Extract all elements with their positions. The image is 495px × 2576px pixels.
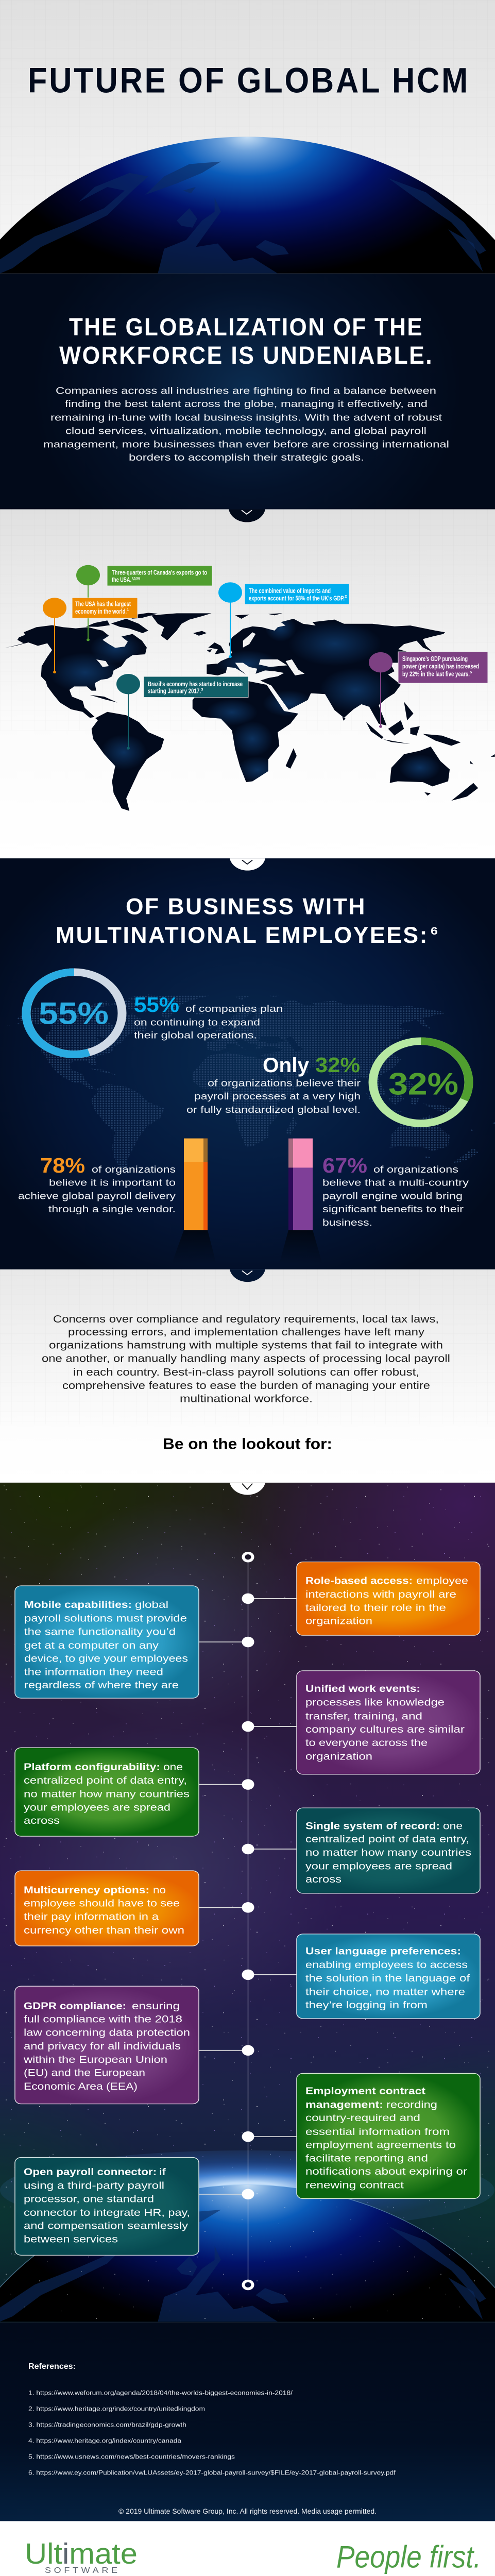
text block: intro paragraph: cloud services, virtualization, mobile technology, and global payroll (65, 426, 426, 436)
feature: mobile capabilities: global (135, 1599, 168, 1611)
logo: Ultimate Software: SOFTWARE (45, 2566, 117, 2575)
panel: compliance text (0, 1269, 495, 1483)
logo: Ultimate Software: Ultimate (25, 2537, 138, 2570)
callout: Brazil: starting January 2017. (148, 687, 201, 695)
text block: intro paragraph: finding the best talent across the globe, managing it effectively, and (65, 399, 428, 410)
callout: UK: exports account for 58% of the UK’s GDP. (249, 594, 345, 602)
feature: GDPR compliance: ensuring (132, 2000, 180, 2011)
callout: Canada: Three-quarters of Canada’s exports go to (112, 569, 207, 576)
stat: 55% of companies: of companies plan (185, 1004, 283, 1014)
stat: only 32%: or fully standardized global level. (186, 1104, 361, 1115)
feature: user language preferences: enabling employees to access (305, 1959, 468, 1971)
feature: platform configurability: centralized point of data entry, (24, 1774, 187, 1786)
stat: 67% of organizations: 67% (322, 1154, 367, 1177)
donut chart: 55% (26, 972, 122, 1055)
feature: GDPR compliance (15, 1986, 254, 2104)
text block: concerns paragraph: processing errors, and implementation challenges have left many (68, 1326, 425, 1337)
stat: only 32%: of organizations believe their (208, 1078, 361, 1089)
stat: only 32%: Only (263, 1054, 309, 1077)
callout: USA: 1 (127, 608, 129, 612)
feature: unified work events: organization (305, 1751, 372, 1762)
copyright: © 2019 Ultimate Software Group, Inc. All rights reserved. Media usage permitted. (118, 2508, 377, 2516)
feature: user language preferences: their choice, no matter where (305, 1986, 465, 1997)
panel: multinational statistics (0, 858, 495, 1269)
callout: Canada (76, 565, 212, 641)
feature: unified work events: to everyone across the (305, 1737, 428, 1748)
globe with sunrise glow (0, 2150, 495, 2323)
text block: intro paragraph: Companies across all industries are fighting to find a balance between (56, 385, 436, 396)
callout: UK: 2 (345, 595, 347, 599)
feature: GDPR compliance: Economic Area (EEA) (24, 2081, 138, 2092)
feature: unified work events: Unified work events: (305, 1683, 420, 1694)
feature: multicurrency options: their pay information in a (24, 1911, 159, 1922)
feature: employment contract management: notifications about expiring or (305, 2166, 467, 2177)
feature: role-based access: Role-based access: (305, 1575, 413, 1586)
feature: single system of record: centralized point of data entry, (305, 1834, 469, 1845)
feature: multicurrency options (15, 1871, 254, 1946)
heading: multinational employees: OF BUSINESS WITH (126, 894, 366, 919)
feature: mobile capabilities: Mobile capabilities: (24, 1599, 132, 1611)
feature: open payroll connector: using a third-party payroll (24, 2180, 164, 2191)
text block: reference list: 5. https://www.usnews.com/news/best-countries/movers-rankings (28, 2453, 235, 2460)
feature: multicurrency options: currency other than their own (24, 1924, 184, 1936)
text block: reference list: 2. https://www.heritage.org/index/country/unitedkingdom (28, 2405, 205, 2412)
text block: intro paragraph: borders to accomplish their strategic goals. (129, 452, 364, 463)
world map (5, 613, 495, 811)
feature: open payroll connector: Open payroll connector: (24, 2166, 157, 2178)
stat: only 32%: payroll processes at a very high (194, 1091, 361, 1102)
heading: references: References: (28, 2362, 76, 2371)
feature: multicurrency options: no (153, 1884, 166, 1895)
feature: employment contract management: Employment contract (305, 2085, 425, 2096)
feature: employment contract management: management: (305, 2099, 383, 2110)
arrow: chevron text to features (230, 1483, 265, 1495)
feature: GDPR compliance: within the European Union (23, 2054, 167, 2065)
feature: user language preferences: the solution in the language of (305, 1972, 470, 1984)
text block: concerns paragraph: comprehensive features to ease the burden of managing your entire (62, 1379, 430, 1391)
feature: mobile capabilities: regardless of where they are (24, 1680, 179, 1691)
feature: single system of record: one (443, 1820, 463, 1832)
feature: employment contract management: renewing contract (305, 2179, 404, 2191)
feature: GDPR compliance: law concerning data protection (24, 2027, 190, 2038)
feature: single system of record: across (305, 1874, 342, 1885)
feature: unified work events (242, 1671, 480, 1774)
stat: 67% of organizations: of organizations (373, 1164, 458, 1175)
feature: platform configurability: no matter how many countries (24, 1788, 190, 1800)
stat: 55% of companies: on continuing to expand (134, 1017, 260, 1028)
stat: 67% of organizations: significant benefits to their (322, 1204, 464, 1215)
stat: 67% of organizations (322, 1154, 469, 1228)
stat: 78% of organizations (18, 1154, 176, 1215)
donut chart: 32% (373, 1041, 469, 1124)
callout: Singapore: 5 (470, 670, 472, 674)
feature: employment contract management: country-required and (305, 2112, 420, 2124)
feature: open payroll connector (15, 2158, 254, 2255)
text block: intro paragraph: management, more businesses than ever before are crossing international (43, 439, 449, 450)
stat: 78% of organizations: achieve global payroll delivery (18, 1191, 176, 1201)
feature: role-based access: employee (416, 1575, 468, 1586)
text block: concerns paragraph: organizations hamstrung with multiple systems that fail to integrate with (49, 1339, 443, 1351)
feature: role-based access (242, 1562, 480, 1635)
callout: UK: The combined value of imports and (249, 587, 331, 595)
feature: GDPR compliance: GDPR compliance: (24, 2000, 126, 2011)
text block: reference list: 4. https://www.heritage.org/index/country/canada (28, 2437, 182, 2444)
stat: 55% of companies: their global operations. (134, 1030, 257, 1041)
feature: open payroll connector: processor, one standard (24, 2193, 154, 2205)
panel: world map (0, 509, 495, 811)
feature: user language preferences: they’re logging in from (305, 1999, 428, 2011)
donut chart: 32%: 32% (388, 1066, 458, 1101)
bar chart: 78% (172, 1139, 216, 1264)
stat: 55% of companies (134, 993, 283, 1041)
arrow: chevron stats to text (230, 1269, 265, 1282)
feature: unified work events: transfer, training, and (305, 1710, 422, 1722)
feature: single system of record: no matter how many countries (305, 1846, 471, 1858)
callout: USA: The USA has the largest (75, 600, 131, 607)
callout: USA (43, 598, 138, 673)
text block: reference list (28, 2389, 396, 2476)
feature: multicurrency options: Multicurrency options: (24, 1884, 149, 1895)
text block: intro paragraph (43, 385, 449, 463)
dotted world map (0, 991, 495, 1177)
feature: employment contract management: employment agreements to (305, 2139, 456, 2150)
stat: 78% of organizations: through a single vendor. (48, 1204, 176, 1215)
callout: Brazil: 3 (201, 687, 203, 691)
feature: GDPR compliance: full compliance with the 2018 (24, 2013, 182, 2025)
feature: mobile capabilities: the information they need (24, 1666, 163, 1677)
stat: 67% of organizations: payroll engine would bring (322, 1191, 463, 1201)
text block: concerns paragraph: Concerns over compliance and regulatory requirements, local tax laws, (53, 1313, 439, 1325)
callout: USA: economy in the world. (75, 607, 127, 615)
callout: Canada: 4,5,5% (132, 577, 140, 581)
feature: open payroll connector: between services (24, 2233, 118, 2245)
feature: unified work events: company cultures are similar (305, 1724, 465, 1735)
timeline line (243, 1553, 252, 2289)
arrow: chevron map to stats (230, 858, 265, 871)
stat: only 32%: 32% (315, 1054, 360, 1077)
stat: 55% of companies: 55% (134, 993, 179, 1016)
text block: reference list: 6. https://www.ey.com/Publication/vwLUAssets/ey-2017-global-payroll-survey/$FILE/ey-2017-global-payroll-survey.pdf (28, 2469, 396, 2476)
feature: GDPR compliance: and privacy for all individuals (24, 2041, 181, 2052)
callout: Brazil (116, 674, 248, 750)
feature: single system of record: Single system of record: (305, 1820, 440, 1832)
feature: unified work events: processes like knowledge (305, 1697, 445, 1708)
feature: employment contract management: essential information from (305, 2126, 450, 2137)
feature: employment contract management: recording (386, 2099, 437, 2110)
panel: intro (0, 274, 495, 509)
footer (0, 2521, 495, 2576)
feature: platform configurability: across (24, 1815, 60, 1826)
feature: platform configurability (15, 1748, 254, 1836)
feature: role-based access: interactions with payroll are (305, 1589, 456, 1600)
feature: user language preferences: User language preferences: (305, 1945, 461, 1957)
heading: be on the lookout: Be on the lookout for: (163, 1435, 332, 1452)
feature: mobile capabilities: the same functionality you’d (24, 1626, 176, 1637)
heading: multinational employees: MULTINATIONAL EMPLOYEES: (56, 923, 429, 948)
feature: employment contract management (242, 2073, 480, 2198)
feature: mobile capabilities (15, 1586, 254, 1698)
text block: concerns paragraph: in each country. Best-in-class payroll solutions can offer robust, (73, 1366, 419, 1378)
heading: multinational employees (56, 894, 438, 948)
heading: multinational employees: 6 (431, 924, 438, 937)
feature: mobile capabilities: get at a computer on any (24, 1639, 159, 1651)
text block: intro paragraph: remaining in-tune with local business insights. With the advent of robust (50, 412, 442, 423)
text block: concerns paragraph (42, 1313, 450, 1404)
feature: multicurrency options: employee should have to see (24, 1897, 180, 1909)
feature: single system of record (242, 1808, 480, 1893)
callout: Singapore (369, 652, 488, 728)
feature: single system of record: your employees are spread (305, 1860, 452, 1872)
text block: reference list: 3. https://tradingeconomics.com/brazil/gdp-growth (28, 2421, 186, 2428)
text block: concerns paragraph: multinational workforce. (180, 1393, 313, 1404)
donut chart: 55%: 55% (39, 996, 109, 1030)
text block: reference list: 1. https://www.weforum.org/agenda/2018/04/the-worlds-biggest-economies-in-2018/ (28, 2389, 293, 2397)
feature: mobile capabilities: payroll solutions must provide (24, 1613, 187, 1624)
callout: Canada: the USA. (112, 575, 131, 583)
stat: 78% of organizations: 78% (40, 1154, 85, 1177)
feature: employment contract management: facilitate reporting and (305, 2153, 428, 2164)
feature: open payroll connector: and compensation seamlessly (24, 2220, 188, 2231)
stat: only 32% (186, 1054, 361, 1115)
heading: globalization (59, 314, 433, 369)
bar chart: 67% (279, 1139, 322, 1264)
stat: 78% of organizations: believe it is important to (49, 1177, 176, 1188)
feature: platform configurability: your employees are spread (24, 1802, 170, 1813)
globe (0, 137, 495, 274)
arrow: chevron intro (229, 509, 265, 522)
feature: role-based access: tailored to their role in the (305, 1602, 446, 1614)
feature: platform configurability: Platform configurability: (24, 1761, 160, 1773)
feature: open payroll connector: connector to integrate HR, pay, (24, 2207, 190, 2218)
text block: concerns paragraph: one another, or manually handling many aspects of processing local payroll (42, 1352, 450, 1364)
stat: 78% of organizations: of organizations (92, 1164, 176, 1175)
feature: user language preferences (242, 1934, 480, 2019)
panel: features timeline on space background (0, 1483, 495, 2323)
panel: title header with globe (0, 0, 495, 274)
panel: references (0, 2323, 495, 2521)
feature: mobile capabilities: device, to give your employees (24, 1653, 188, 1664)
feature: open payroll connector: if (159, 2166, 166, 2178)
feature: platform configurability: one (163, 1761, 183, 1773)
callout: Brazil: Brazil’s economy has started to increase (148, 680, 243, 688)
stat: 67% of organizations: believe that a multi-country (322, 1177, 469, 1188)
callout: UK (218, 582, 349, 658)
feature: GDPR compliance: (EU) and the European (24, 2067, 145, 2078)
stat: 67% of organizations: business. (322, 1217, 372, 1228)
feature: role-based access: organization (305, 1615, 372, 1626)
